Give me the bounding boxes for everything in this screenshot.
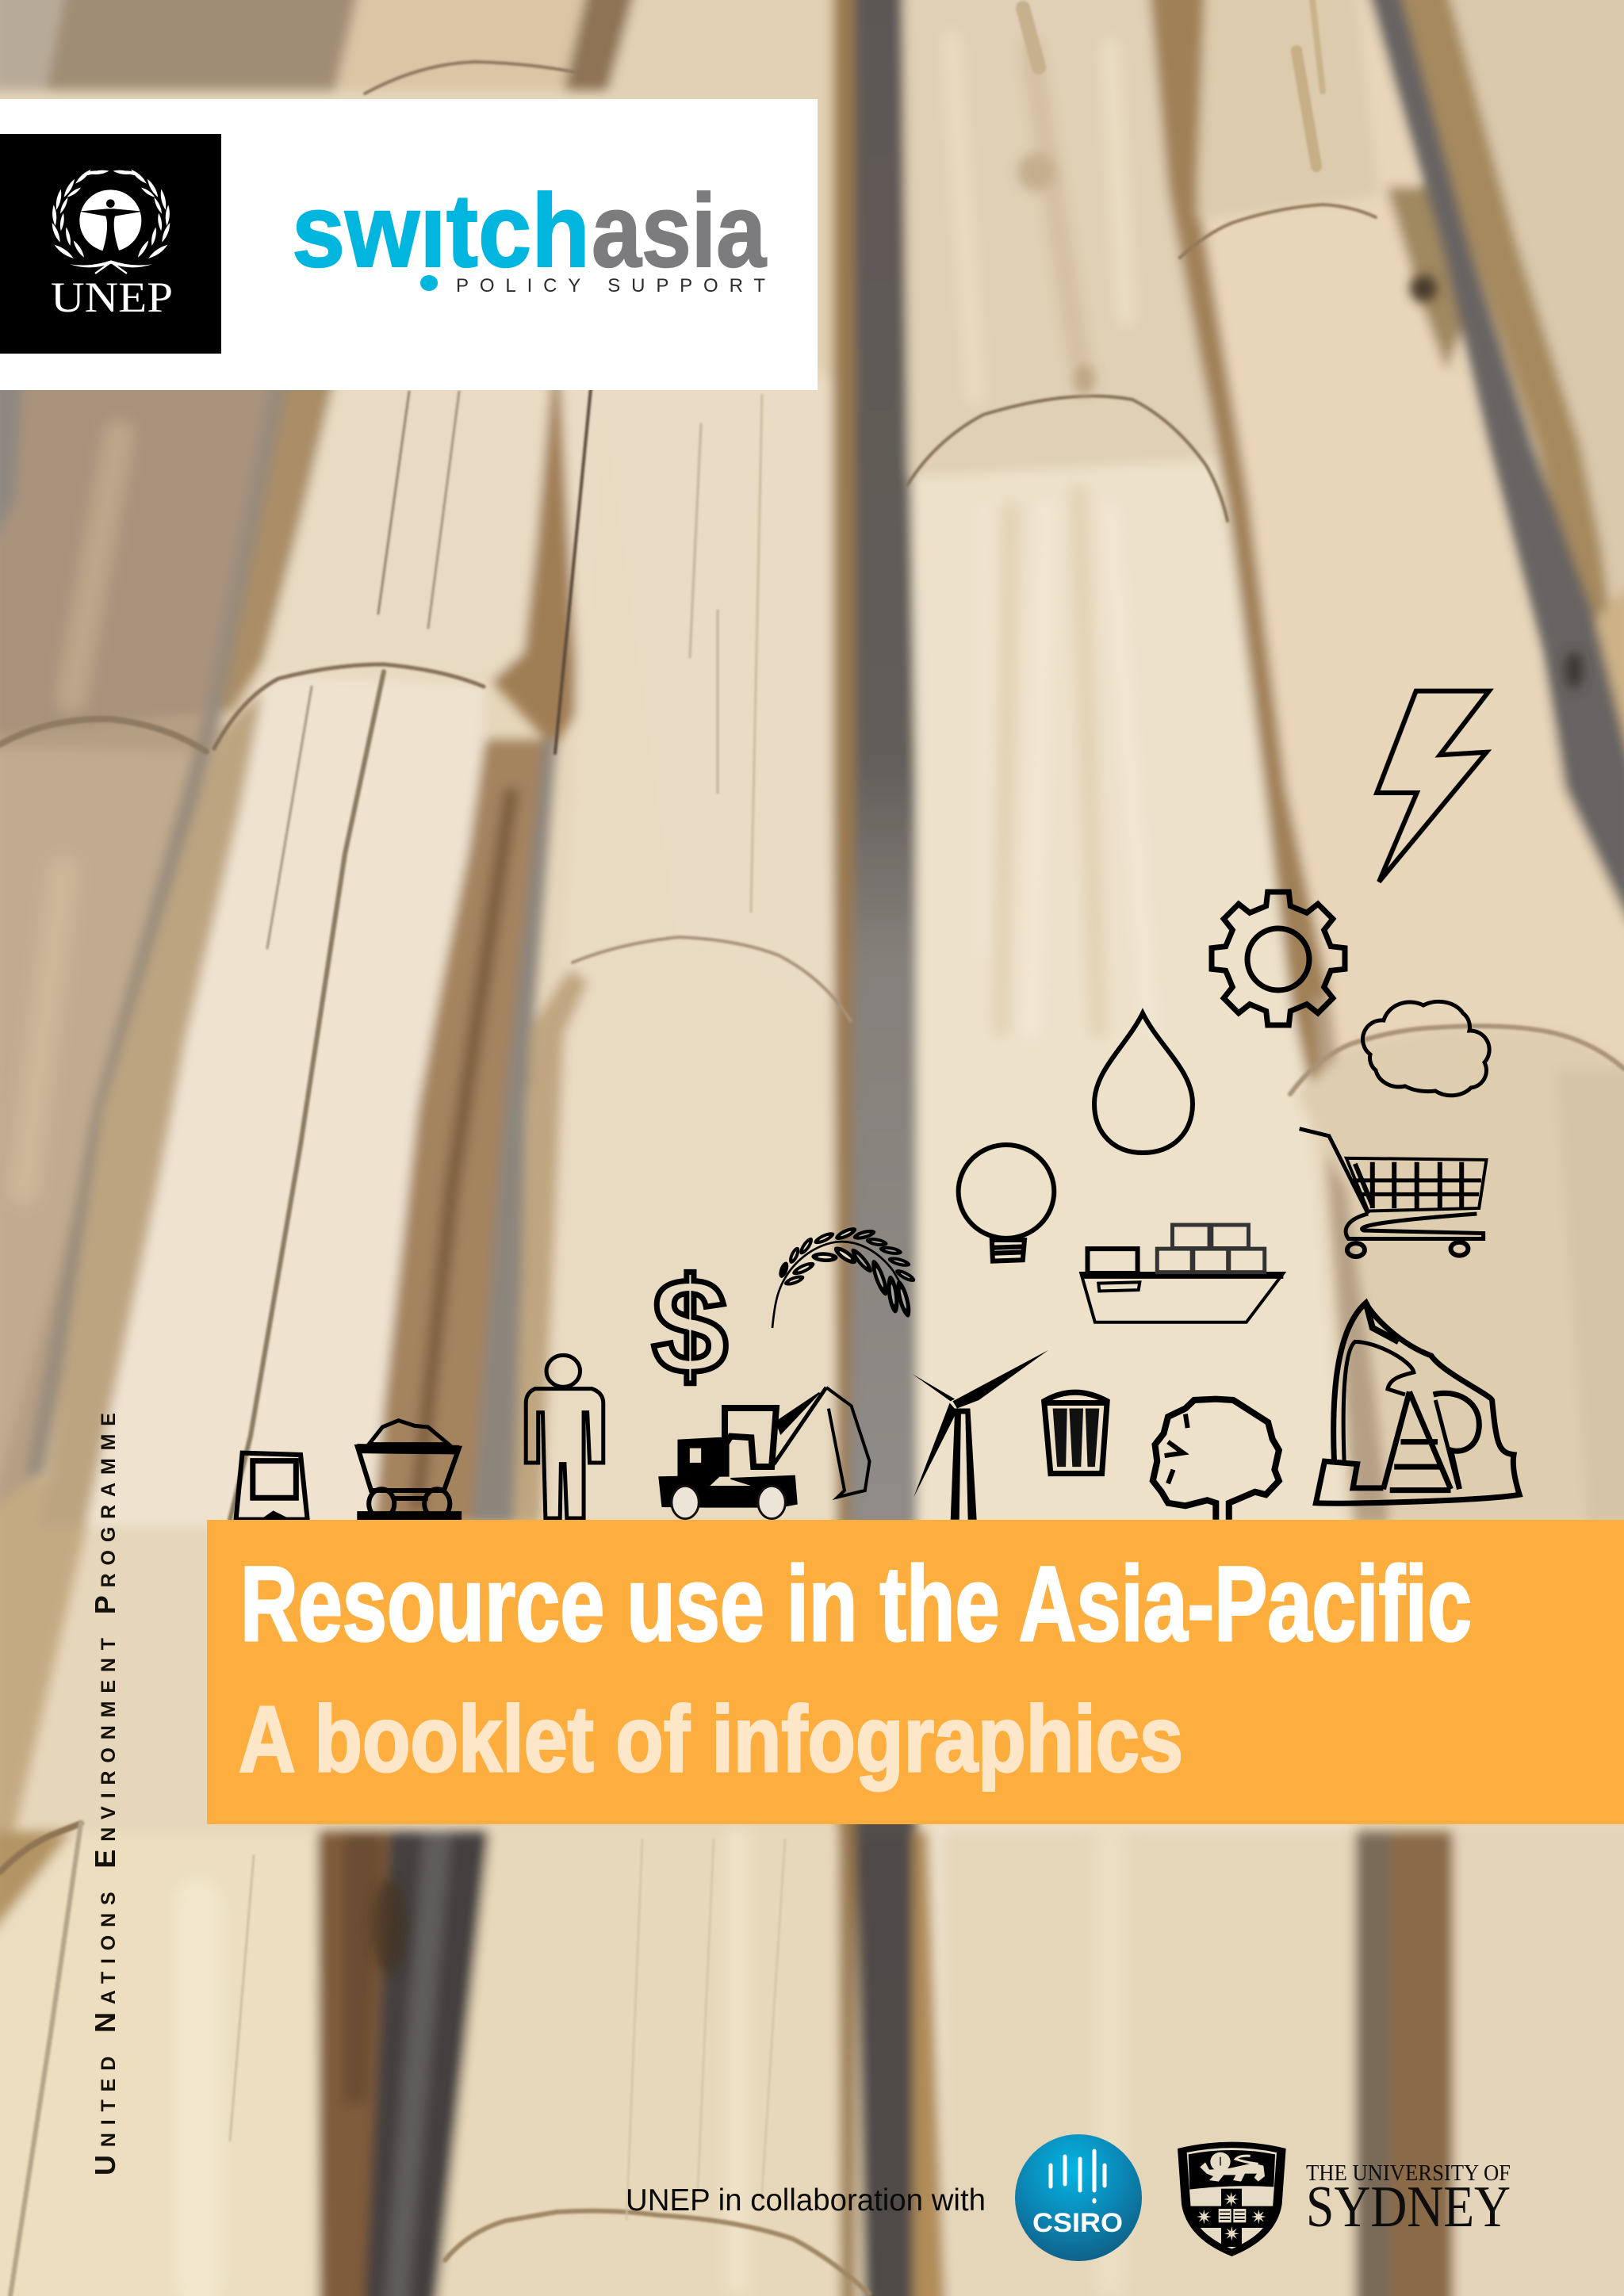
icon: trash bin <box>1044 1392 1107 1474</box>
icon: wind turbine <box>912 1350 1048 1520</box>
UNEP logo block <box>0 134 221 354</box>
icon: lightning bolt <box>1377 691 1489 882</box>
tagline: POLICY SUPPORT <box>456 275 765 297</box>
CSIRO wordmark: CSIRO <box>1032 2208 1123 2238</box>
logo dot <box>420 275 438 291</box>
icon: excavator <box>659 1387 870 1519</box>
UNEP wreath <box>50 168 172 274</box>
UNEP emblem <box>79 189 143 254</box>
University of Sydney wordmark: SYDNEY <box>1306 2175 1511 2240</box>
icon: tree <box>1153 1399 1279 1520</box>
University of Sydney wordmark: THE UNIVERSITY OF <box>1306 2160 1511 2186</box>
icon: oil pump <box>1316 1303 1519 1503</box>
icon: person <box>526 1355 603 1518</box>
collaboration note: UNEP in collaboration with <box>626 2183 986 2218</box>
wordmark: asia: asia <box>592 172 767 289</box>
UNEP wordmark: UNEP <box>51 274 173 321</box>
icon: power station <box>236 1453 308 1520</box>
subtitle: A booklet of infographics <box>239 1687 1183 1792</box>
switch asia logo <box>292 172 767 297</box>
vertical organisation name: United Nations Environment Programme <box>89 1413 121 2175</box>
orange title banner <box>207 1520 1624 1824</box>
icon: light bulb <box>959 1145 1054 1261</box>
icon: cloud <box>1362 1001 1489 1096</box>
University of Sydney crest <box>1178 2142 1286 2256</box>
icon: gear <box>1212 892 1345 1025</box>
icon: shopping cart <box>1300 1129 1486 1257</box>
icon: water drop <box>1094 1013 1193 1153</box>
wordmark: switch: switch <box>292 172 590 289</box>
icon: dollar sign: $ <box>652 1250 728 1402</box>
icon: rice stalk <box>772 1225 917 1328</box>
mask over the i dot <box>419 187 445 210</box>
CSIRO logo <box>1015 2134 1142 2261</box>
icon: ore cart <box>358 1421 462 1520</box>
icon: container ship <box>1081 1225 1283 1322</box>
